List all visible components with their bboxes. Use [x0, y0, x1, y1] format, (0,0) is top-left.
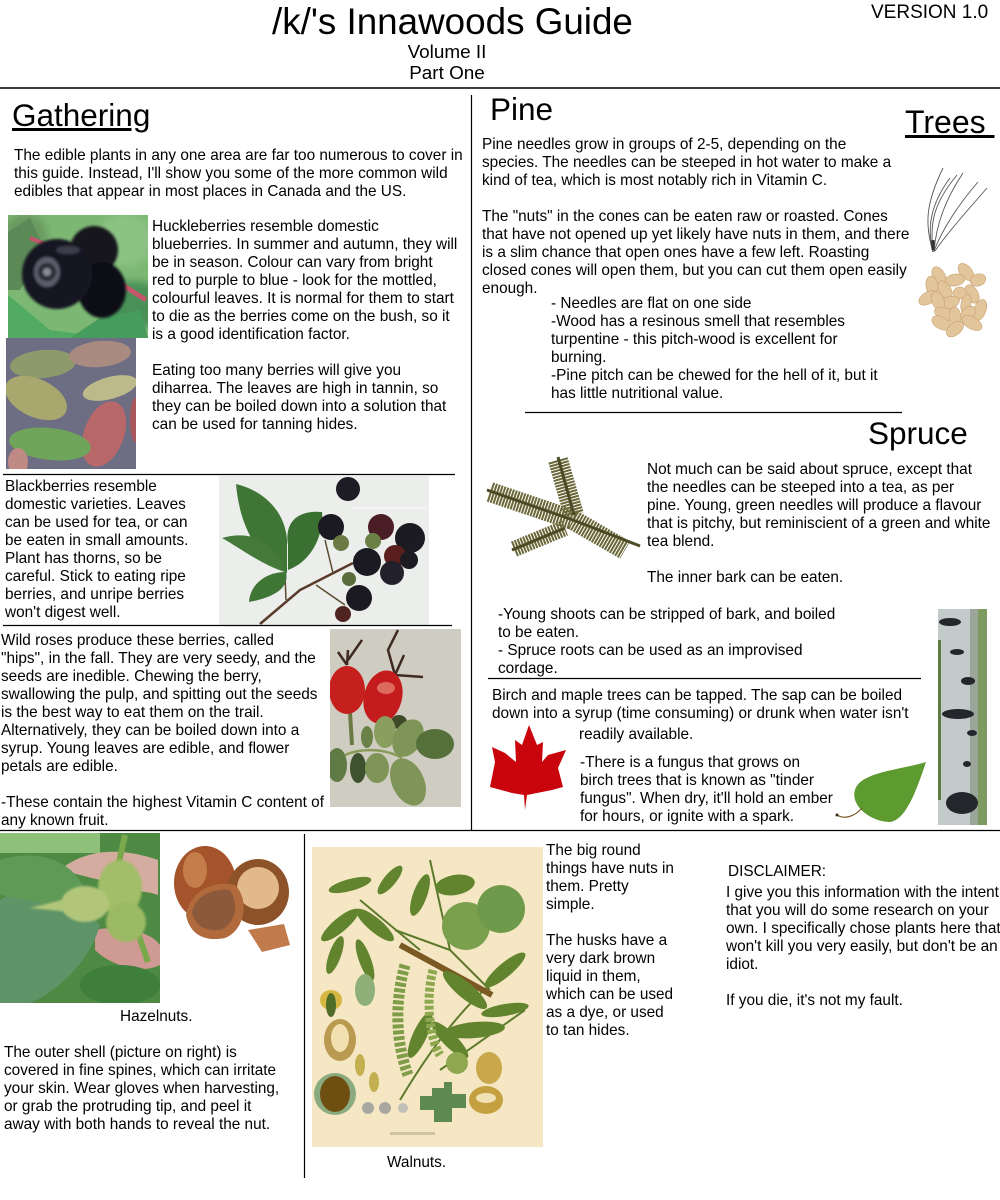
photo: huckleberries	[8, 215, 148, 338]
photo: rose hips	[327, 629, 461, 811]
disclaimer text: I give you this information with the intent that you will do some research on your own. I specifically chose plants here that won't kill you very easily, but don't be an idiot. If you die, it's not my fault.	[726, 884, 1000, 1009]
text: spruce bullets: -Young shoots can be stripped of bark, and boiled to be eaten. - Spruce roots can be used as an improvised cordage.	[498, 606, 835, 677]
rule	[3, 624, 452, 626]
illustration: walnut botanical plate	[312, 847, 543, 1147]
heading: spruce: Spruce	[868, 415, 968, 451]
text: huckleberries: Huckleberries resemble domestic blueberries. In summer and autumn, they will be in season. Colour can vary from bright red to purple to blue - look for the mottled, colourful leaves. It is normal for them to start to die as the berries come on the bush, so it is a good identification factor. Eating too many berries will give you diharrea. The leaves are high in tannin, so they can be boiled down into a solution that can be used for tanning hides.	[152, 218, 457, 433]
icon: red maple leaf	[490, 725, 566, 810]
heading: trees: Trees	[905, 104, 986, 140]
text: pine intro: Pine needles grow in groups of 2-5, depending on the species. The needles can be steeped in hot water to make a kind of tea, which is most notably rich in Vitamin C. The "nuts" in the cones can be eaten raw or roasted. Cones that have not opened up yet likely have nuts in them, and there is a slim chance that open ones have a few left. Roasting closed cones will open them, but you can cut them open easily enough.	[482, 136, 909, 297]
illustration: pine needles	[928, 168, 987, 252]
version label: VERSION 1.0	[871, 2, 988, 23]
text: rose hips: Wild roses produce these berries, called "hips", in the fall. They are very seedy, and the seeds are inedible. Chewing the berry, swallowing the pulp, and spitting out the seeds is the best way to eat them on the trail. Alternatively, they can be boiled down into a syrup. Young leaves are edible, and flower petals are edible. -These contain the highest Vitamin C content of any known fruit.	[1, 632, 324, 829]
text: blackberries: Blackberries resemble domestic varieties. Leaves can be used for tea, or can be eaten in small amounts. Plant has thorns, so be careful. Stick to eating ripe berries, and unripe berries won't digest well.	[5, 478, 188, 621]
photo: hazelnuts in shells	[174, 846, 290, 952]
photo: pine nuts	[916, 260, 989, 340]
disclaimer heading: DISCLAIMER:	[728, 863, 826, 880]
caption: hazelnuts: Hazelnuts.	[120, 1008, 192, 1025]
text: walnuts: The big round things have nuts in them. Pretty simple. The husks have a very dark brown liquid in them, which can be used as a dye, or used to tan hides.	[546, 842, 674, 1039]
rule	[525, 412, 902, 414]
panel: trees	[482, 91, 994, 825]
photo: birch trunk	[938, 609, 987, 825]
rule	[3, 474, 455, 476]
photo: blackberries	[219, 476, 429, 625]
text: birch and maple sap: Birch and maple trees can be tapped. The sap can be boiled down into a syrup (time consuming) or drunk when water isn't	[492, 687, 909, 722]
text: sap continuation: readily available.	[579, 726, 693, 743]
title: /k/'s Innawoods Guide	[272, 1, 633, 42]
heading: gathering: Gathering	[12, 97, 150, 133]
photo: hazelnuts on the branch	[0, 833, 160, 1005]
illustration: spruce branch	[487, 457, 640, 550]
text: hazelnut shell: The outer shell (picture on right) is covered in fine spines, which can irritate your skin. Wear gloves when harvesting, or grab the protruding tip, and peel it away with both hands to reveal the nut.	[4, 1044, 279, 1133]
text: spruce: Not much can be said about spruce, except that the needles can be steeped into a tea, as per pine. Young, green needles will produce a flavour that is pitchy, but reminiscient of a green and white tea blend. The inner bark can be eaten.	[647, 461, 990, 586]
photo: huckleberry leaves	[6, 338, 136, 469]
text: tinder fungus: -There is a fungus that grows on birch trees that is known as "tinder fungus". When dry, it'll hold an ember for hours, or ignite with a spark.	[580, 754, 833, 825]
text: introduction: The edible plants in any one area are far too numerous to cover in this guide. Instead, I'll show you some of the more common wild edibles that appear in most places in Canada and the US.	[14, 147, 463, 200]
text: pine bullets: - Needles are flat on one side -Wood has a resinous smell that resembles turpentine - this pitch-wood is excellent for burning. -Pine pitch can be chewed for the hell of it, but it has little nutritional value.	[551, 295, 878, 402]
panel: gathering	[1, 97, 463, 829]
subtitle: volume and part: Volume II Part One	[408, 42, 486, 84]
heading: pine: Pine	[490, 91, 553, 127]
caption: walnuts: Walnuts.	[387, 1154, 446, 1171]
panel: header	[272, 1, 988, 84]
rule	[488, 678, 921, 680]
photo: birch leaf	[836, 762, 926, 822]
panel: nuts and disclaimer	[0, 833, 1000, 1178]
vertical divider	[304, 834, 306, 1178]
